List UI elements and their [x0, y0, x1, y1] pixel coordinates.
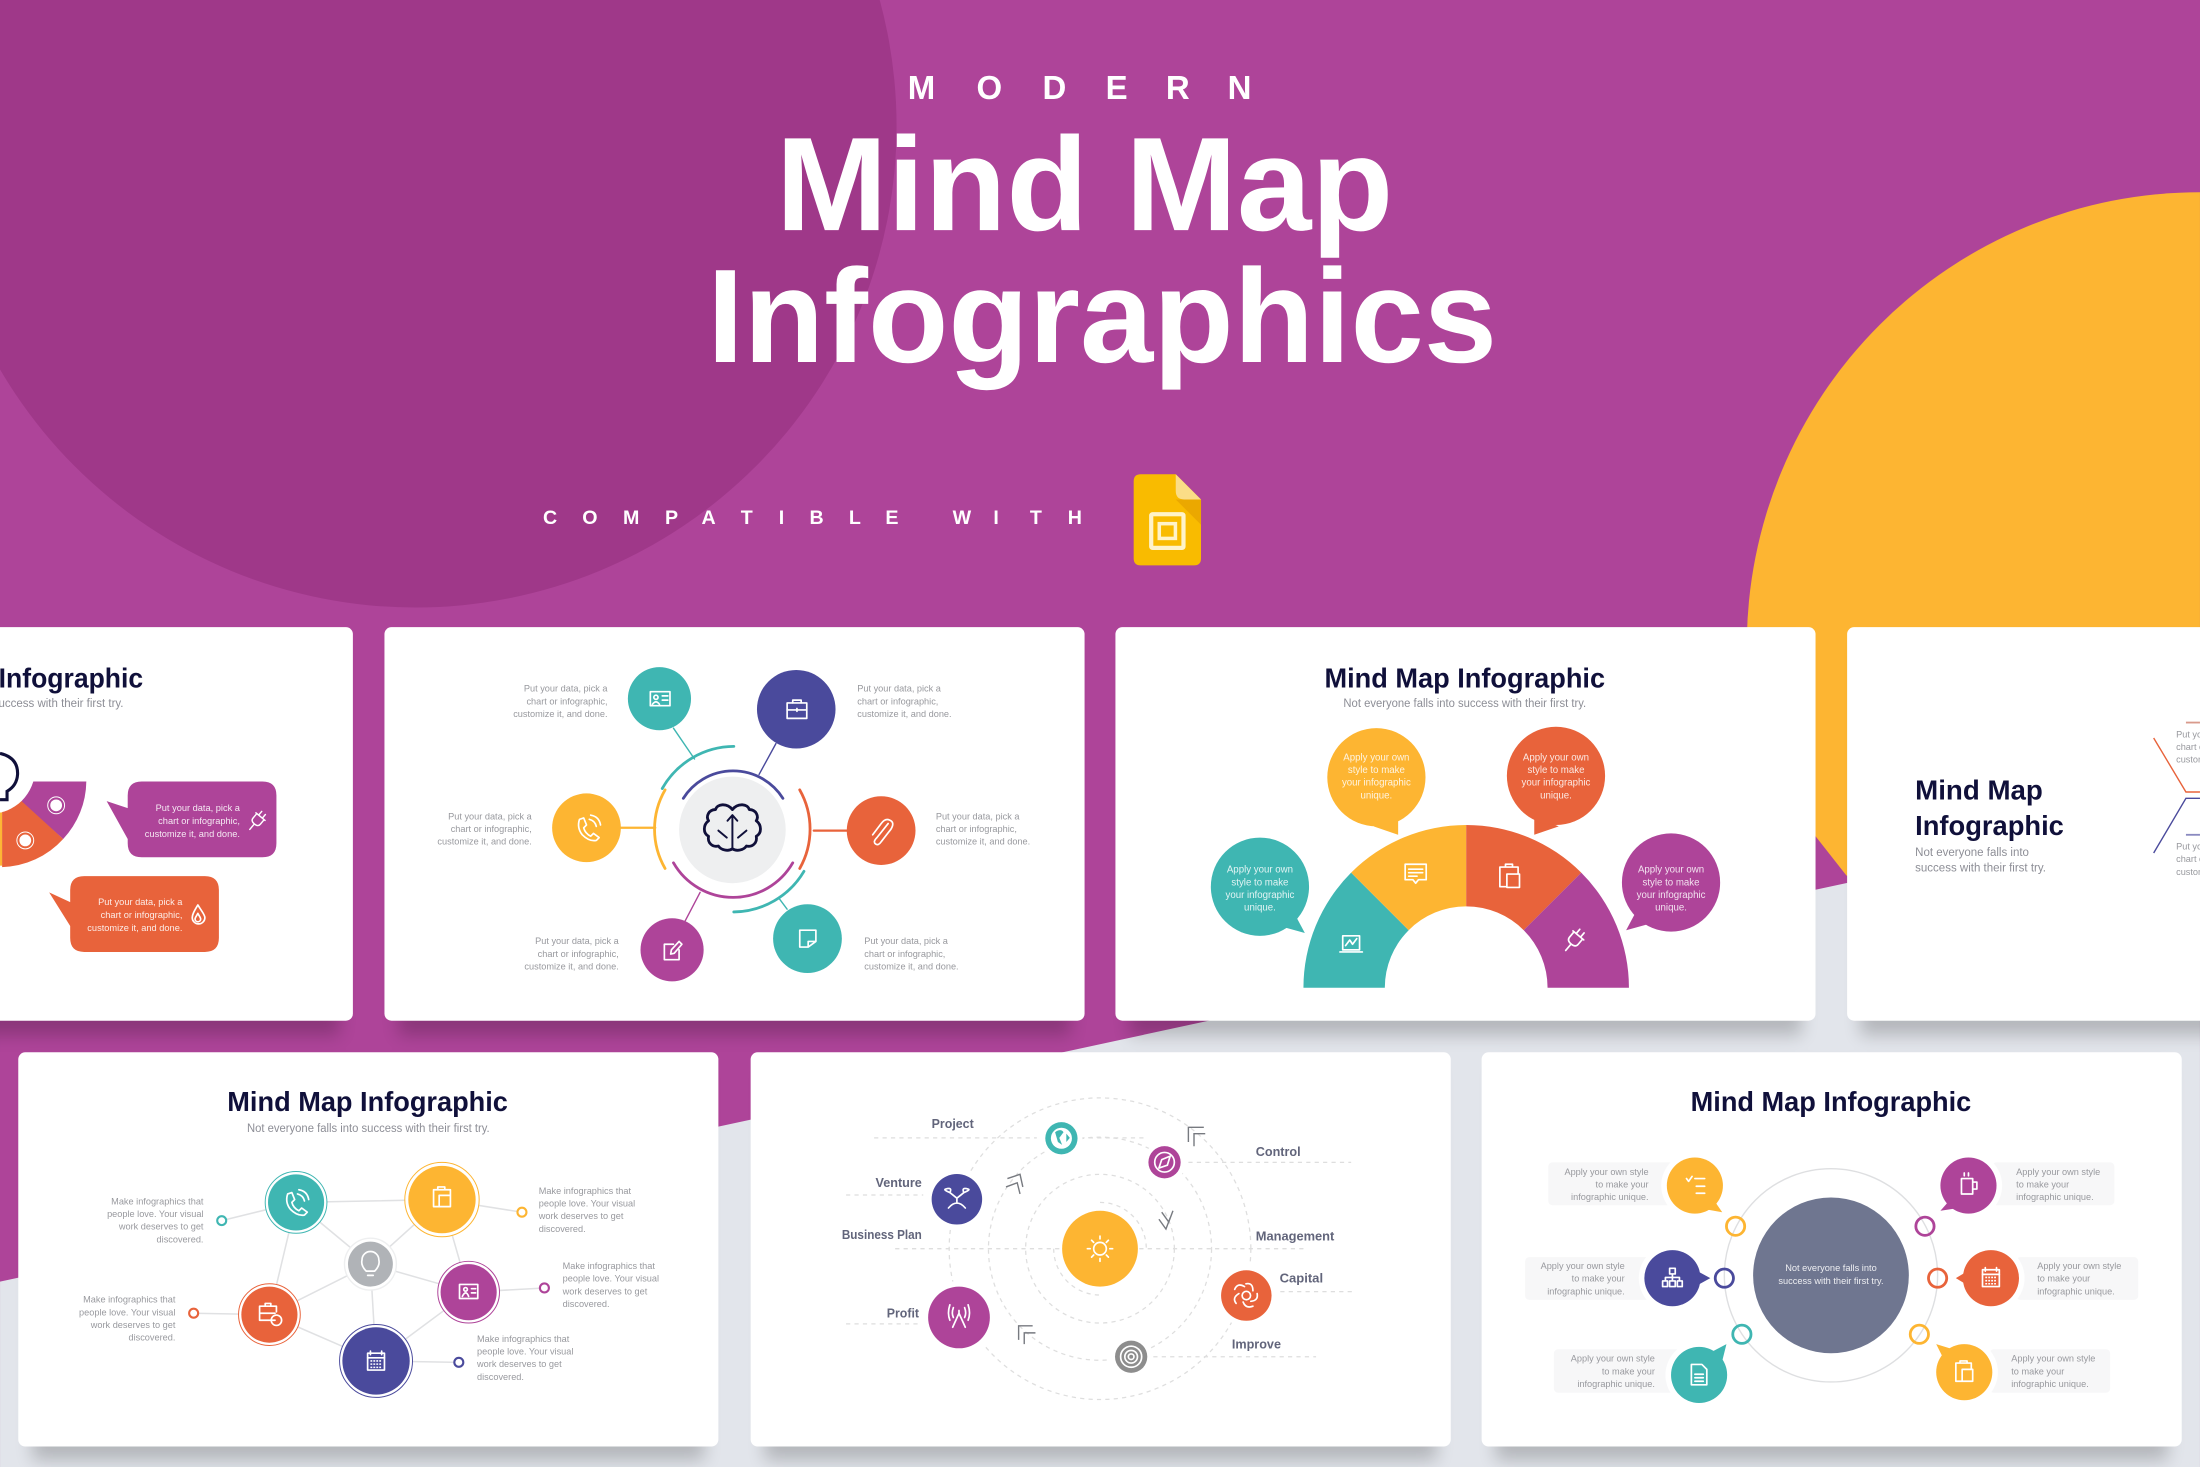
text: node captions: discovered. — [477, 1372, 524, 1382]
background: light grey diagonal — [0, 807, 2200, 1467]
text: node captions: work deserves to get — [476, 1359, 562, 1369]
icon: comment note — [1405, 864, 1426, 883]
orbit labels: Control — [1256, 1145, 1301, 1159]
text: node captions: chart or infographic, — [526, 696, 608, 706]
semicircle chart fragment — [0, 724, 86, 867]
text: bubble captions: to make your — [1596, 1179, 1649, 1189]
callout: yellow bubble: unique. — [1361, 790, 1392, 801]
text: bubble captions: to make your — [2011, 1366, 2064, 1376]
callout: purple speech bubble: customize it, and done. — [145, 829, 240, 839]
callout: yellow bubble: your infographic — [1342, 778, 1411, 789]
callout: magenta bubble: unique. — [1655, 903, 1687, 914]
orbit labels: Profit — [887, 1306, 920, 1320]
slide subtitle: Not everyone falls into success with their first try. — [1343, 698, 1586, 710]
text: node captions: customize it, and done. — [936, 837, 1030, 847]
text: node captions: work deserves to get — [538, 1211, 624, 1221]
node: magenta ID card — [438, 1261, 500, 1323]
node: orange briefcase clock — [239, 1284, 300, 1345]
slide title: Mind Map — [1915, 775, 2043, 806]
text: node captions: discovered. — [539, 1224, 586, 1234]
orbit labels: Improve — [1232, 1337, 1281, 1351]
text: node captions: Make infographics that — [83, 1295, 176, 1305]
central hub: Not everyone falls into — [1785, 1263, 1877, 1273]
callout: orange bubble: your infographic — [1522, 778, 1591, 789]
panel: slide cropped left — [0, 627, 353, 1021]
main title: Mind Map — [776, 110, 1393, 259]
text: node captions: discovered. — [157, 1234, 203, 1244]
text: bubble captions: infographic unique. — [1571, 1192, 1649, 1202]
callout: magenta bubble: your infographic — [1637, 890, 1706, 901]
text: node captions: people love. Your visual — [79, 1307, 175, 1317]
text: bubble captions: infographic unique. — [1547, 1286, 1625, 1296]
slide title — [1915, 775, 2064, 841]
node: teal sticky note — [773, 904, 842, 973]
panel: network mind map — [18, 1052, 718, 1447]
orbit labels — [842, 1117, 1335, 1351]
text: node captions: people love. Your visual — [107, 1209, 203, 1219]
panel: arch speech bubbles — [1115, 627, 1816, 1021]
slide title: Mind Map Infographic — [1324, 662, 1605, 693]
end rings — [189, 1208, 549, 1367]
text: node captions: work deserves to get — [118, 1222, 204, 1232]
text: node captions: Put your data, pick a — [535, 936, 620, 946]
text: bubble captions: to make your — [2037, 1274, 2090, 1284]
small rings — [1715, 1217, 1947, 1343]
text: node captions: chart or infographic, — [936, 824, 1017, 834]
text: bubble captions: Apply your own style — [2016, 1167, 2100, 1177]
text: node captions: Make infographics that — [477, 1334, 570, 1344]
outer ring — [1724, 1169, 1938, 1382]
text: node captions: people love. Your visual — [477, 1347, 573, 1357]
callout: magenta bubble: Apply your own — [1638, 865, 1704, 876]
node: magenta compass — [1143, 1141, 1186, 1183]
text: node captions: chart or infographic, — [538, 949, 619, 959]
panel: solar orbit diagram — [751, 1052, 1451, 1447]
icon: lightbulb — [0, 753, 18, 800]
text: node captions: chart or infographic, — [864, 949, 945, 959]
text: bubble captions: Apply your own style — [1564, 1167, 1649, 1177]
text: bubble captions: to make your — [1602, 1366, 1655, 1376]
text: bubble captions: infographic unique. — [2016, 1192, 2094, 1202]
bubble: teal document — [1665, 1341, 1733, 1409]
bubble: yellow checklist — [1661, 1152, 1729, 1219]
central hub: success with their first try. — [1778, 1276, 1884, 1286]
text: node captions: work deserves to get — [562, 1286, 648, 1296]
node: teal ID card — [628, 667, 691, 730]
panel: hub and bubbles — [1482, 1052, 2182, 1447]
node: navy briefcase — [757, 670, 836, 749]
callout: teal bubble: Apply your own — [1227, 865, 1293, 876]
text: node captions: customize it, and done. — [437, 837, 532, 847]
label leader lines — [846, 1138, 1355, 1357]
callout: yellow bubble: Apply your own — [1343, 752, 1409, 763]
text: bubble captions: Apply your own style — [1541, 1261, 1625, 1271]
text: node captions: Make infographics that — [111, 1196, 204, 1206]
header label: modern: MODERN — [908, 69, 1251, 106]
text: node captions: Make infographics that — [563, 1261, 655, 1271]
slide title: Mind Map Infographic — [1691, 1086, 1971, 1117]
chart: segmented arch — [1303, 825, 1629, 988]
main title — [707, 110, 1497, 391]
text: bubble captions: infographic unique. — [2037, 1286, 2115, 1296]
bubble: yellow clipboard — [1931, 1338, 1998, 1406]
text: node captions: people love. Your visual — [539, 1199, 635, 1209]
callout: teal bubble: your infographic — [1226, 890, 1295, 901]
central grey circle — [679, 777, 786, 883]
text: node captions — [79, 1186, 659, 1382]
callout: yellow bubble: style to make — [1348, 765, 1405, 776]
callout: magenta bubble — [1622, 833, 1720, 932]
slide subtitle: Not everyone falls into — [1915, 847, 2029, 859]
callout: teal bubble: unique. — [1244, 903, 1276, 914]
text: bubble captions: to make your — [1572, 1274, 1625, 1284]
connector lines — [620, 728, 847, 922]
callout: orange bubble: unique. — [1540, 790, 1572, 801]
text: node captions: Put your data, pick a — [864, 936, 949, 946]
text: node captions: Put your data, pick a — [857, 684, 942, 694]
slide title fragment: Infographic — [0, 662, 143, 693]
text: branch captions — [2176, 729, 2200, 877]
callout: magenta bubble: style to make — [1643, 877, 1700, 888]
orbit labels: Venture — [876, 1176, 922, 1190]
text: node captions — [437, 684, 1030, 971]
node: orange swirl — [1215, 1265, 1277, 1326]
callout: yellow bubble — [1327, 728, 1426, 835]
orbit labels: Management — [1256, 1229, 1335, 1243]
text tags — [1525, 1162, 2138, 1393]
text: bubble captions — [1541, 1167, 2121, 1389]
text: node captions: discovered. — [129, 1333, 175, 1343]
text: node captions: work deserves to get — [90, 1320, 176, 1330]
node: teal globe — [1040, 1117, 1082, 1159]
callout: orange speech bubble: customize it, and done. — [87, 923, 182, 933]
callout: orange speech bubble: Put your data, pick a — [98, 897, 183, 907]
slide subtitle: success with their first try. — [1915, 862, 2046, 874]
text: node captions: customize it, and done. — [857, 709, 952, 719]
text: node captions: chart or infographic, — [451, 824, 532, 834]
icon: slides file — [1134, 474, 1201, 565]
node: navy calendar — [340, 1324, 413, 1397]
text: node captions: chart or infographic, — [857, 696, 938, 706]
node: yellow phone — [552, 793, 621, 862]
text: bubble captions: infographic unique. — [1577, 1379, 1655, 1389]
icon: plug — [1560, 927, 1587, 955]
callout: purple speech bubble: chart or infographic, — [158, 816, 240, 826]
text: node captions: customize it, and done. — [524, 961, 619, 971]
panel: slide cropped right — [1847, 627, 2200, 1021]
compatible with label: COMPATIBLE WITH — [543, 507, 1082, 529]
callout: orange bubble: Apply your own — [1523, 752, 1589, 763]
text: node captions: Make infographics that — [539, 1186, 632, 1196]
text: bubble captions: infographic unique. — [2011, 1379, 2089, 1389]
text: bubble captions: Apply your own style — [1571, 1354, 1655, 1364]
branch lines — [2154, 723, 2200, 853]
central hub — [1753, 1197, 1909, 1353]
bubble: navy org chart — [1639, 1244, 1710, 1312]
main title: Infographics — [707, 242, 1497, 391]
node: magenta edit — [641, 918, 704, 981]
text: node captions: customize it, and done. — [864, 961, 959, 971]
node: orange paperclip — [847, 796, 916, 865]
text: node captions: Put your data, pick a — [448, 811, 533, 821]
slide title: Mind Map Infographic — [227, 1086, 508, 1117]
text: bubble captions: to make your — [2016, 1179, 2069, 1189]
callout: orange bubble: style to make — [1527, 765, 1584, 776]
direction chevrons — [1006, 1127, 1205, 1344]
orbit labels: Project — [932, 1117, 975, 1131]
node: grey lightbulb — [344, 1238, 396, 1290]
callout: teal bubble — [1211, 838, 1309, 936]
node: magenta antenna — [923, 1281, 995, 1354]
callout: orange bubble — [1507, 727, 1605, 835]
callout: purple speech bubble — [107, 781, 276, 857]
icon: laptop chart — [1340, 936, 1362, 952]
background: yellow circle — [1747, 192, 2200, 982]
node: navy sprout — [926, 1168, 988, 1230]
slide title: Infographic — [1915, 810, 2064, 841]
slide subtitle: Not everyone falls into success with their first try. — [247, 1123, 490, 1135]
callout: orange speech bubble — [49, 876, 219, 952]
text: bubble captions: Apply your own style — [2011, 1354, 2095, 1364]
bubble: orange calendar — [1956, 1244, 2025, 1312]
text: node captions: customize it, and done. — [513, 709, 608, 719]
orbit labels: Capital — [1280, 1271, 1323, 1285]
card shadows — [0, 643, 2200, 1461]
text: node captions: discovered. — [563, 1299, 610, 1309]
icon: clipboard and phone — [1500, 864, 1520, 887]
ring arcs — [655, 746, 810, 912]
node: teal phone — [265, 1172, 327, 1233]
text: node captions: people love. Your visual — [563, 1274, 659, 1284]
orbit rings — [949, 1098, 1251, 1400]
text: node captions: Put your data, pick a — [936, 811, 1020, 821]
network lines — [194, 1200, 544, 1362]
background: dark circle — [0, 0, 897, 608]
node: yellow clipboard — [405, 1162, 479, 1237]
orbit labels: Business Plan — [842, 1228, 922, 1242]
text: bubble captions: Apply your own style — [2037, 1261, 2121, 1271]
callout: orange speech bubble: chart or infographic, — [101, 910, 182, 920]
bubble: magenta cup — [1935, 1152, 2002, 1219]
text: node captions: Put your data, pick a — [524, 684, 608, 694]
callout: teal bubble: style to make — [1231, 877, 1288, 888]
sun node — [1062, 1211, 1138, 1287]
panel: radial brain mind map — [384, 627, 1085, 1021]
callout: purple speech bubble: Put your data, pick a — [156, 803, 241, 813]
icon: brain — [704, 805, 760, 850]
node: grey target — [1110, 1336, 1152, 1378]
